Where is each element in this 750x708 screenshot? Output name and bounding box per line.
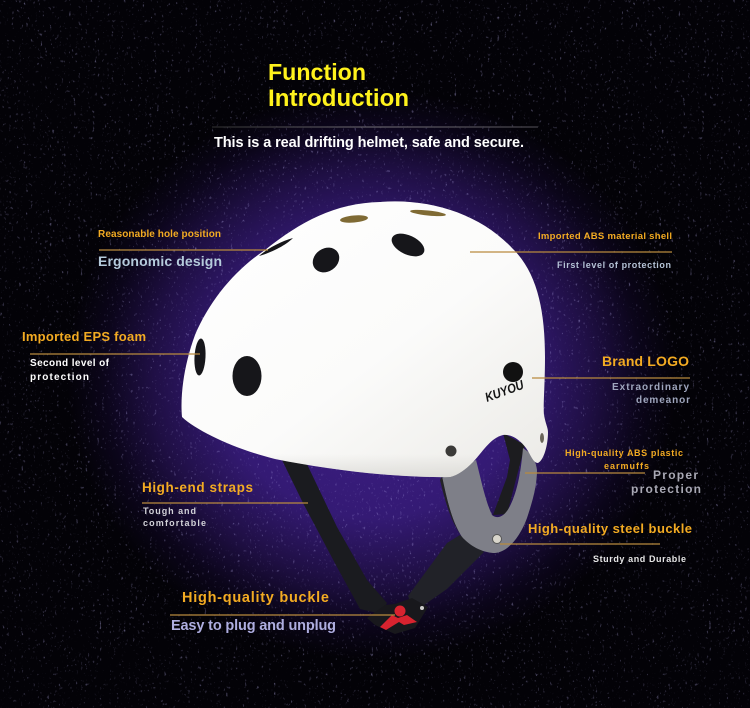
label: EPS foam: Imported EPS foam — [22, 329, 146, 344]
label: steel buckle — [500, 521, 692, 564]
label: hole position: Reasonable hole position — [98, 229, 221, 240]
label: earmuffs — [525, 448, 701, 496]
side rivets — [446, 433, 544, 456]
title: Function — [268, 59, 366, 85]
right strap — [408, 535, 484, 612]
inner padding — [493, 433, 525, 515]
left strap — [282, 460, 387, 614]
label: straps: High-end straps — [142, 480, 253, 495]
shell bottom shading — [182, 395, 503, 477]
label: straps: Tough and — [143, 506, 196, 516]
label: straps — [142, 480, 308, 528]
label: steel buckle: Sturdy and Durable — [593, 554, 686, 564]
title — [268, 59, 409, 112]
label: brand logo: Extraordinary — [612, 382, 689, 393]
label: ABS shell: First level of protection — [557, 260, 671, 270]
label: buckle: High-quality buckle — [182, 590, 329, 606]
label: brand logo — [532, 353, 690, 406]
earmuff edge — [440, 476, 468, 543]
helmet — [182, 201, 548, 634]
label: straps: comfortable — [143, 518, 206, 528]
label: earmuffs: protection — [631, 482, 701, 496]
brand logo — [483, 362, 526, 405]
label: ABS shell: Imported ABS material shell — [538, 231, 672, 242]
label: EPS foam — [22, 329, 200, 383]
label: EPS foam: protection — [30, 372, 89, 383]
red buckle — [367, 598, 428, 634]
label: steel buckle: High-quality steel buckle — [528, 521, 692, 536]
label: hole position: Ergonomic design — [98, 253, 222, 269]
label: buckle — [170, 590, 395, 634]
subtitle: This is a real drifting helmet, safe and secure. — [214, 135, 524, 151]
label: brand logo: demeanor — [636, 395, 690, 406]
label: EPS foam: Second level of — [30, 358, 110, 369]
brand logo: KUYOU — [483, 377, 526, 405]
steel rivet — [492, 534, 502, 544]
label: buckle: Easy to plug and unplug — [171, 618, 336, 634]
label: hole position — [98, 229, 268, 269]
label: earmuffs: earmuffs — [604, 461, 649, 471]
label: earmuffs: High-quality ABS plastic — [565, 448, 683, 458]
top vents — [340, 209, 446, 224]
label: brand logo: Brand LOGO — [602, 353, 689, 369]
title: Introduction — [268, 85, 409, 112]
shell — [182, 201, 548, 477]
earmuff — [442, 448, 537, 553]
vent holes — [194, 229, 428, 396]
title rule — [212, 126, 538, 128]
label: ABS shell — [470, 231, 672, 270]
label: earmuffs: Proper — [653, 468, 698, 482]
